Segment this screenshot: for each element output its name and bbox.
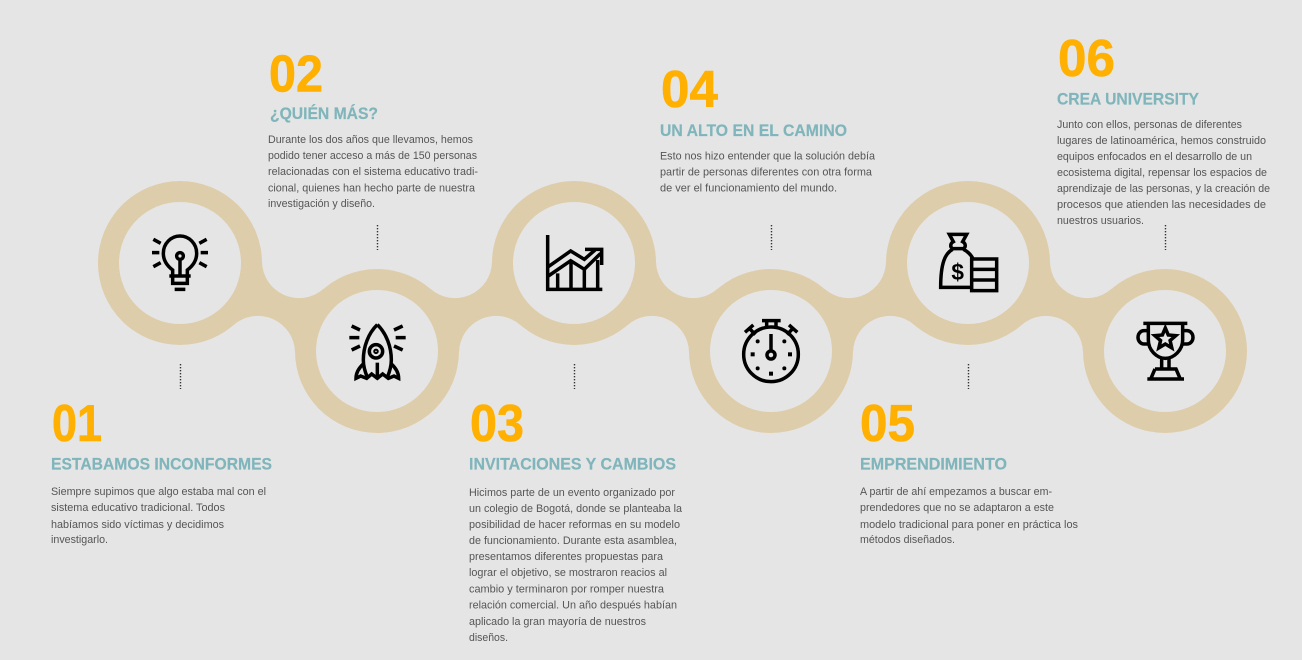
number 06: 06	[1058, 30, 1115, 88]
icon: money bag and coins	[941, 234, 997, 291]
number 04: 04	[661, 61, 718, 119]
body 03: presentamos diferentes propuestas para	[469, 551, 664, 563]
heading 06: CREA UNIVERSITY	[1057, 90, 1200, 108]
text block: step 05	[860, 395, 1078, 546]
heading 04: UN ALTO EN EL CAMINO	[660, 121, 847, 140]
body 01: habíamos sido víctimas y decidimos	[51, 519, 224, 531]
body 06: ecosistema digital, repensar los espacios de	[1057, 167, 1267, 179]
body 02: cional, quienes han hecho parte de nuestra	[268, 182, 476, 194]
heading 05: EMPRENDIMIENTO	[860, 454, 1007, 474]
body 02	[268, 134, 478, 210]
body 03: diseños.	[469, 632, 508, 644]
body 03: un colegio de Bogotá, donde se planteaba la	[469, 503, 683, 515]
number 01: 01	[52, 395, 102, 453]
body 04: Esto nos hizo entender que la solución debía	[660, 150, 876, 162]
body 06: Junto con ellos, personas de diferentes	[1057, 119, 1242, 131]
icon: growth chart	[548, 235, 602, 289]
body 05: métodos diseñados.	[860, 534, 955, 546]
dotted connector 3	[574, 364, 576, 389]
body 01: investigarlo.	[51, 534, 108, 546]
body 01: Siempre supimos que algo estaba mal con el	[51, 486, 266, 498]
heading 03: INVITACIONES Y CAMBIOS	[469, 454, 676, 474]
icon: rocket	[349, 325, 406, 379]
heading 01: ESTABAMOS INCONFORMES	[51, 454, 272, 474]
body 06: procesos que atienden las necesidades de	[1057, 199, 1266, 211]
body 06: equipos enfocados en el desarrollo de un	[1057, 151, 1252, 163]
number 03: 03	[470, 395, 524, 453]
body 03: Hicimos parte de un evento organizado por	[469, 487, 675, 499]
number 02: 02	[269, 46, 323, 104]
body 02: Durante los dos años que llevamos, hemos	[268, 134, 473, 146]
body 02: relacionadas con el sistema educativo tradi-	[268, 166, 478, 178]
body 05: modelo tradicional para poner en práctica los	[860, 519, 1078, 531]
body 06: aprendizaje de las personas, y la creación de	[1057, 183, 1270, 195]
body 02: podido tener acceso a más de 150 personas	[268, 150, 477, 162]
body 03	[469, 487, 683, 644]
icon: money bag and coins: $	[951, 259, 964, 285]
body 04: partir de personas diferentes con otra forma	[660, 166, 873, 178]
icon: trophy	[1138, 323, 1193, 379]
icon: stopwatch	[744, 321, 798, 382]
body 03: relación comercial. Un año después habían	[469, 600, 677, 612]
body 05	[860, 486, 1078, 546]
body 04	[660, 150, 876, 194]
number 05: 05	[860, 395, 915, 453]
text block: step 01	[51, 395, 272, 546]
body 02: investigación y diseño.	[268, 198, 375, 210]
body 03: de funcionamiento. Durante esta asamblea,	[469, 535, 677, 547]
body 03: posibilidad de hacer reformas en su modelo	[469, 519, 680, 531]
body 01: sistema educativo tradicional. Todos	[51, 502, 225, 514]
body 06: nuestros usuarios.	[1057, 215, 1144, 227]
winding ring path of six linked circles	[98, 181, 1247, 433]
body 06: lugares de latinoamérica, hemos construido	[1057, 135, 1266, 147]
text block: step 03	[469, 395, 683, 644]
body 05: A partir de ahí empezamos a buscar em-	[860, 486, 1052, 498]
icon: light bulb	[152, 236, 208, 289]
text block: step 04	[660, 61, 876, 194]
dotted connector 1	[180, 364, 182, 389]
body 04: de ver el funcionamiento del mundo.	[660, 182, 837, 194]
heading 02: ¿QUIÉN MÁS?	[270, 104, 378, 123]
text block: step 06	[1057, 30, 1270, 227]
text block: step 02	[268, 46, 478, 210]
body 05: prendedores que no se adaptaron a este	[860, 502, 1054, 514]
body 06	[1057, 119, 1270, 227]
dotted connector 6	[1164, 225, 1166, 250]
dotted connector 5	[968, 364, 970, 389]
dotted connector 4	[770, 225, 772, 250]
body 03: aplicado la gran mayoría de nuestros	[469, 616, 646, 628]
body 01	[51, 486, 266, 546]
body 03: cambio y terminaron por romper nuestra	[469, 584, 665, 596]
dotted connector 2	[376, 225, 378, 250]
body 03: lograr el objetivo, se mostraron reacios al	[469, 567, 667, 579]
